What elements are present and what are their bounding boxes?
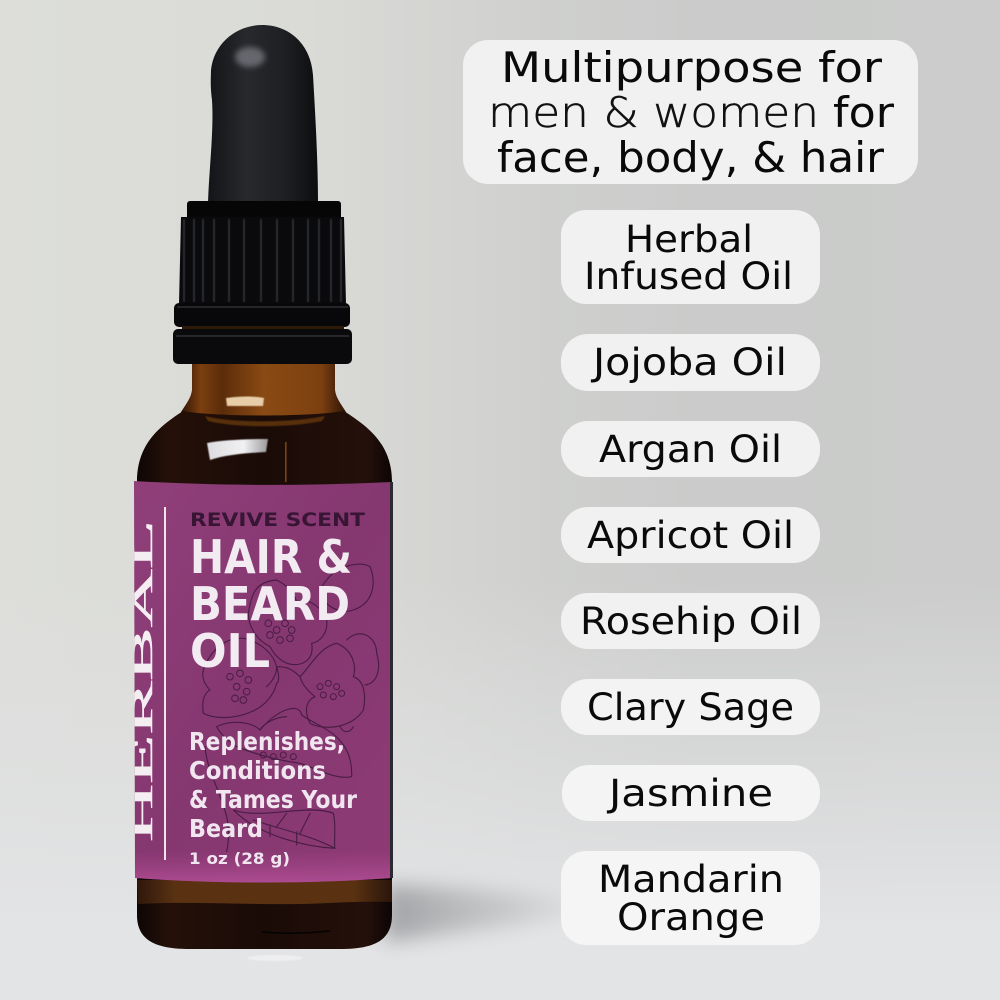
pill: argan oil [561, 421, 820, 477]
product benefits: Conditions [189, 756, 326, 785]
net weight: 1 oz (28 g) [189, 849, 290, 868]
pill: multipurpose headline: men & women [488, 88, 819, 137]
divider line [164, 507, 166, 860]
product title: OIL [190, 624, 270, 678]
pill: herbal infused oil: Herbal [625, 218, 753, 261]
pill: jasmine: Jasmine [607, 772, 773, 815]
pill: jojoba oil: Jojoba Oil [591, 341, 787, 384]
pill: clary sage [561, 679, 820, 735]
pill: multipurpose headline: face, body, & hair [497, 133, 885, 182]
product benefits: Beard [189, 814, 263, 843]
base glare [262, 931, 330, 933]
pill: jasmine [562, 765, 820, 821]
pill: apricot oil: Apricot Oil [587, 514, 794, 557]
glass body [137, 411, 392, 949]
glass highlights [205, 396, 325, 482]
pill: multipurpose headline [463, 40, 918, 184]
brand name: HERBAL [127, 520, 159, 842]
floor scuff [247, 955, 303, 961]
pill: rosehip oil [561, 593, 820, 649]
pill: multipurpose headline: Multipurpose for [501, 43, 883, 92]
pill: herbal infused oil [561, 210, 820, 304]
product title: BEARD [190, 577, 350, 631]
pill: mandarin orange: Mandarin [598, 858, 784, 901]
pill: multipurpose headline: for [833, 88, 895, 137]
pill: herbal infused oil: Infused Oil [584, 255, 793, 298]
dropper cap [173, 201, 352, 364]
pill: apricot oil [561, 507, 820, 563]
scent name: REVIVE SCENT [190, 509, 365, 531]
pill: mandarin orange [561, 851, 820, 945]
pill: argan oil: Argan Oil [599, 428, 782, 471]
product benefits: Replenishes, [189, 727, 345, 756]
pill: rosehip oil: Rosehip Oil [580, 600, 802, 643]
product benefits: & Tames Your [189, 785, 358, 814]
product benefits [189, 727, 358, 843]
oil level [137, 880, 392, 904]
floral line art [203, 564, 379, 852]
label [127, 481, 393, 882]
pill: mandarin orange: Orange [617, 896, 765, 939]
bottle [127, 25, 393, 949]
product title [190, 530, 352, 678]
amber neck [181, 364, 346, 420]
product title: HAIR & [190, 530, 352, 584]
bottle shadow [385, 885, 610, 942]
pill: clary sage: Clary Sage [587, 686, 794, 729]
pill: jojoba oil [561, 334, 820, 391]
dropper bulb [208, 25, 318, 203]
